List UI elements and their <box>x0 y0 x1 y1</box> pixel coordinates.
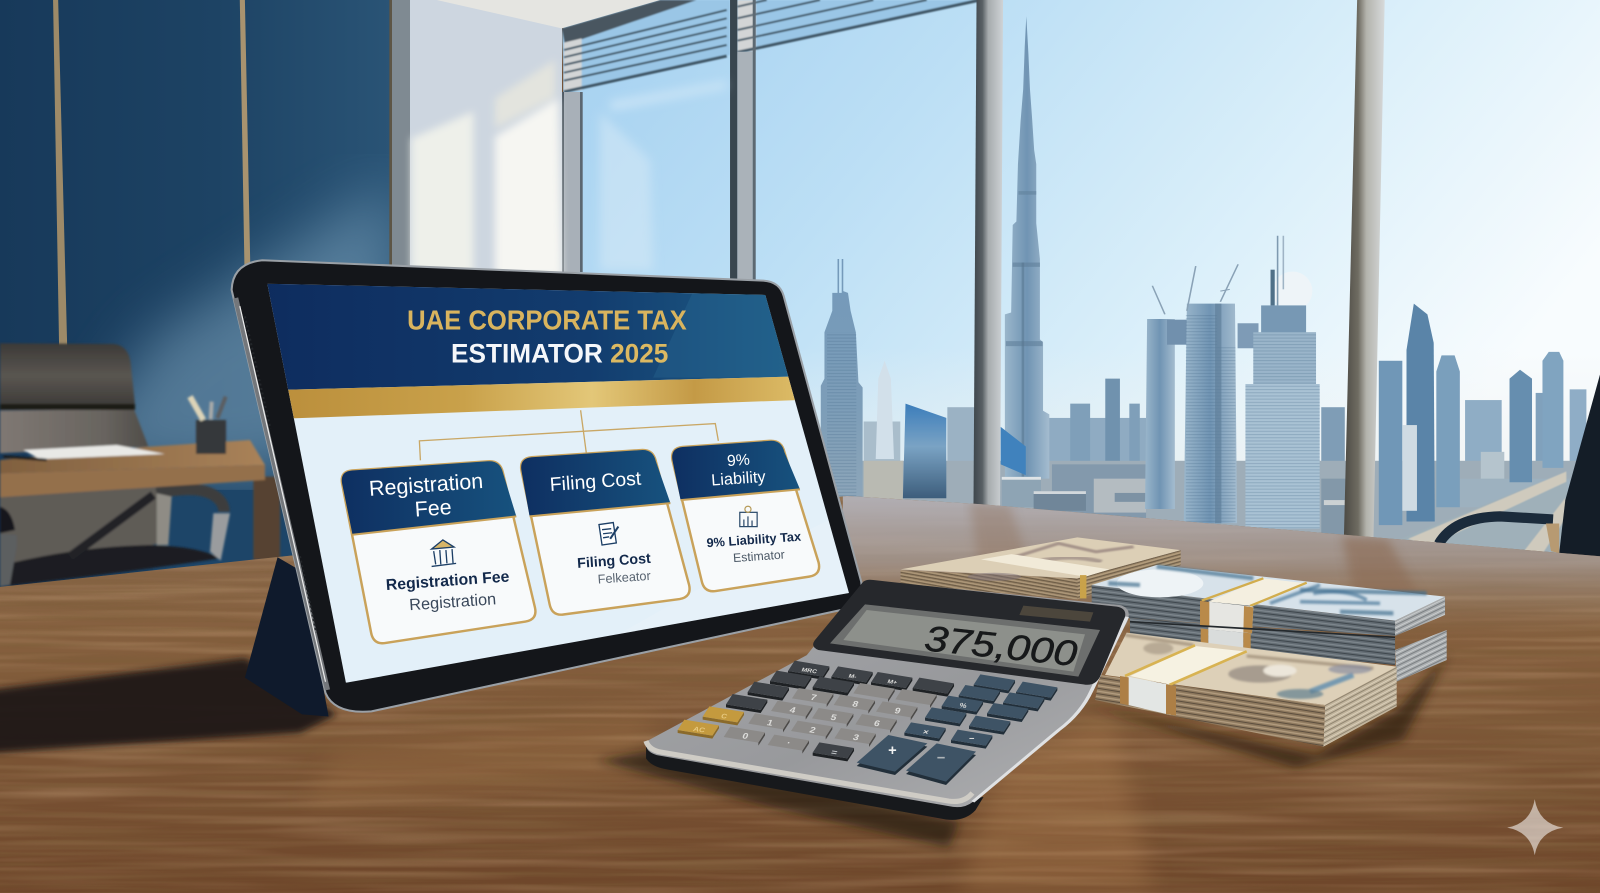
key labels: C <box>720 712 729 721</box>
desk leg <box>253 477 280 560</box>
key labels: + <box>888 743 897 759</box>
display assembly <box>813 580 1125 685</box>
card: 9% liability: 9% <box>726 452 750 470</box>
card: 9% liability: Liability <box>711 468 767 490</box>
left stepped tower <box>821 259 863 504</box>
key labels: = <box>830 748 839 757</box>
back stack of notes <box>901 537 1181 599</box>
blue-toned and tan stacks <box>1092 565 1447 747</box>
key labels: MRC <box>800 667 818 675</box>
card: filing cost: Filing Cost <box>577 551 652 572</box>
screen title: ESTIMATOR 2025 <box>451 338 669 368</box>
screen header band <box>268 284 788 390</box>
sky reflection on table <box>842 496 1600 618</box>
tablet screen <box>268 284 849 683</box>
ceiling <box>437 0 660 28</box>
pen holder <box>190 397 226 454</box>
key labels: 6 <box>873 719 881 728</box>
connector lines <box>419 410 718 460</box>
key labels: M+ <box>886 679 898 686</box>
key labels: . <box>786 736 792 745</box>
card: filing cost: Felkeator <box>597 568 652 587</box>
right foreground chair <box>1439 375 1600 559</box>
key labels: 0 <box>741 731 750 741</box>
key labels: 7 <box>809 693 818 702</box>
card: 9% liability <box>672 441 819 591</box>
large minus key <box>906 743 976 785</box>
card: 9% liability: Estimator <box>733 548 785 565</box>
card: filing cost: Filing Cost <box>549 468 643 496</box>
card: registration fee: Registration <box>409 590 497 614</box>
window frames and mullions <box>562 0 1385 539</box>
card: filing cost <box>521 450 690 615</box>
lcd panel <box>843 610 1085 672</box>
blue glass tower <box>903 404 946 498</box>
icon: document <box>599 523 618 545</box>
key labels: 5 <box>829 713 838 722</box>
tan stack <box>1323 667 1397 747</box>
tablet body <box>232 260 862 712</box>
calculator base shadow side <box>646 747 984 820</box>
key labels: 2 <box>808 725 817 735</box>
background desk and chair <box>0 343 280 587</box>
wooden table <box>0 490 1600 893</box>
skyline through the windows <box>821 16 1596 547</box>
office wall panel <box>0 0 393 592</box>
key labels: M- <box>847 673 858 680</box>
card: registration fee: Fee <box>414 495 452 522</box>
lower layer of blue stack <box>1395 630 1447 682</box>
white spire tower <box>876 361 894 459</box>
calculator keypad <box>678 661 1057 785</box>
large plus key <box>857 735 927 775</box>
card: registration fee: Registration <box>368 469 484 501</box>
horizon haze <box>755 347 1600 551</box>
twin-leg tower <box>1145 319 1175 509</box>
chair arm <box>157 489 224 512</box>
window reflection panes <box>600 82 727 270</box>
cash stacks <box>901 537 1447 747</box>
screen title: UAE CORPORATE TAX <box>407 305 687 336</box>
lcd readout: 375,000 <box>923 618 1079 674</box>
tablet side edge with speaker dots <box>236 298 328 690</box>
chair seat <box>7 545 220 586</box>
key labels: × <box>922 727 930 736</box>
desk <box>0 440 265 473</box>
key labels <box>692 667 975 767</box>
key labels: 3 <box>852 733 860 742</box>
icon: bank <box>432 540 456 566</box>
window sky background <box>563 0 1600 572</box>
card: 9% liability: 9% Liability Tax <box>706 529 802 550</box>
gold divider band <box>285 377 797 418</box>
window blinds and frame corner <box>562 0 980 93</box>
calculator and cash shadows <box>597 750 959 847</box>
Burj Khalifa <box>1005 16 1049 479</box>
key labels: AC <box>692 725 707 734</box>
tablet <box>232 260 878 716</box>
calculator <box>646 580 1129 820</box>
watermark sparkle <box>1507 799 1563 855</box>
key labels: − <box>937 751 945 767</box>
right window towers <box>1379 361 1402 525</box>
key labels: % <box>958 701 969 710</box>
solar strip <box>1019 606 1093 622</box>
tablet kickstand <box>245 557 329 716</box>
tablet shadow on table <box>0 658 337 753</box>
upper layer of blue stack <box>1395 597 1445 636</box>
chair back <box>0 343 135 408</box>
domed tower <box>1273 271 1312 311</box>
desk papers <box>23 445 165 459</box>
screen title <box>407 305 687 368</box>
card: registration fee <box>342 461 535 643</box>
key labels: 9 <box>893 706 902 715</box>
key labels: 8 <box>851 699 860 709</box>
key labels: 1 <box>766 718 774 727</box>
key labels: − <box>969 734 975 744</box>
key labels: 4 <box>788 705 798 715</box>
elevated road <box>1372 472 1571 561</box>
white wall with sunlight <box>389 0 660 277</box>
card: registration fee: Registration Fee <box>385 569 510 594</box>
icon: tax form <box>740 506 757 527</box>
calculator metal body <box>647 581 1129 807</box>
calculator front edge <box>646 741 972 801</box>
low city blocks <box>843 452 1596 547</box>
